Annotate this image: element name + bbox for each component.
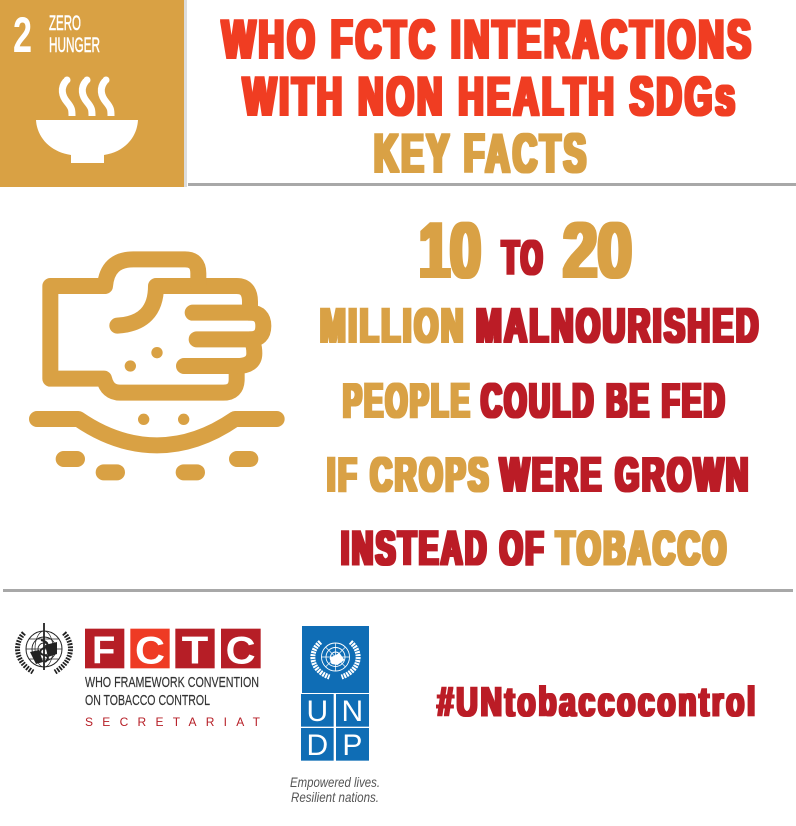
- FCTC letter blocks: C: [226, 630, 256, 673]
- SDG name: ZERO: [49, 12, 81, 35]
- logo: UNDP: N: [342, 695, 363, 728]
- SDG name: HUNGER: [49, 34, 100, 57]
- panel: SDG 2 zero hunger tile: [0, 0, 187, 187]
- SDG name: [49, 12, 100, 57]
- UNDP tagline: [290, 774, 380, 805]
- title: [222, 8, 754, 127]
- headline figure: 10 to 20: 10: [419, 206, 481, 294]
- subtitle: key facts: KEY FACTS: [374, 122, 589, 184]
- headline figure: 10 to 20: TO: [502, 232, 545, 285]
- UNDP tagline: Resilient nations.: [291, 789, 379, 805]
- logo: WHO emblem: [18, 623, 70, 672]
- headline figure: 10 to 20: [419, 206, 632, 294]
- UNDP tagline: Empowered lives.: [290, 774, 380, 790]
- UN emblem: [313, 642, 358, 677]
- icon: steaming bowl: [36, 76, 138, 163]
- SDG number: 2: [13, 7, 32, 63]
- logo: UNDP: D: [307, 729, 328, 762]
- FCTC letter blocks: T: [182, 630, 209, 673]
- FCTC letter blocks: C: [135, 630, 165, 673]
- key fact text: PEOPLE: [343, 375, 472, 428]
- FCTC wordmark: WHO FRAMEWORK CONVENTION: [85, 674, 259, 691]
- FCTC secretariat: SECRETARIAT: [85, 715, 261, 729]
- FCTC letter blocks: F: [92, 630, 115, 673]
- key fact text: INSTEAD OF: [341, 522, 546, 576]
- logo: UNDP: [290, 626, 380, 805]
- FCTC wordmark: [85, 674, 259, 709]
- FCTC letter blocks: [85, 629, 261, 673]
- headline figure: 10 to 20: 20: [563, 206, 632, 294]
- logo: UNDP: P: [342, 729, 362, 762]
- logo: UNDP: U: [307, 695, 328, 728]
- key fact text: IF CROPS: [327, 449, 491, 502]
- key fact text: MILLION: [320, 300, 466, 353]
- FCTC wordmark: ON TOBACCO CONTROL: [85, 692, 210, 709]
- icon: hand over soil: [37, 259, 277, 472]
- logo: FCTC: [85, 629, 261, 729]
- key fact text: [320, 300, 761, 576]
